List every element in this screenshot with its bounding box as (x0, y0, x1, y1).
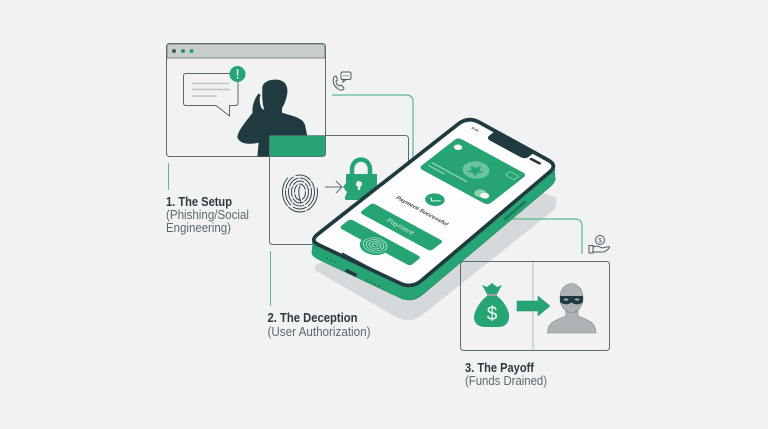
phone side band (312, 122, 555, 300)
icon: fingerprint (282, 172, 318, 212)
success check badge (421, 191, 449, 209)
payment button (360, 203, 443, 251)
connector: setup to phone (332, 95, 413, 162)
phone (312, 118, 555, 300)
label: step 1: 1. The Setup (166, 194, 232, 209)
chat bubble (184, 74, 238, 116)
label: step 2 (268, 310, 370, 339)
panel 3: the payoff (460, 262, 610, 350)
payment card (419, 137, 527, 205)
panel 1: the setup browser window (166, 44, 326, 157)
silhouette: person on phone (237, 80, 307, 157)
status icons (529, 157, 542, 165)
label: step 2: 2. The Deception (268, 310, 358, 325)
label: step 1: (Phishing/Social (166, 208, 249, 222)
phone bottom details (326, 257, 380, 287)
phone bezel and screen (312, 118, 555, 287)
panel 2: the deception (270, 136, 408, 244)
overlap green block (270, 136, 326, 156)
arrow: money to thief (517, 296, 550, 316)
icon: phone with chat (333, 72, 351, 90)
browser dots (172, 49, 194, 53)
payment successful text: Payment Successful (394, 195, 450, 227)
phone notch (486, 130, 536, 160)
fingerprint button (331, 219, 421, 272)
home indicator (342, 253, 372, 269)
phone shadow (318, 185, 553, 317)
step 1 marker line (168, 163, 169, 190)
label: step 1 (166, 194, 249, 235)
icon: money bag (474, 283, 509, 327)
icon: money bag: $ (487, 304, 498, 325)
label: step 3: 3. The Payoff (465, 360, 535, 375)
step 2 marker line (270, 251, 271, 306)
browser title bar (167, 44, 325, 58)
icon: hand with dollar coin: $ (598, 238, 602, 244)
label: step 1: Engineering) (166, 221, 231, 235)
payment button: Payment (384, 217, 417, 237)
connector: phone to payoff (503, 219, 582, 254)
label: step 3: (Funds Drained) (465, 374, 547, 388)
label: step 3 (465, 360, 547, 388)
label: step 2: (User Authorization) (268, 325, 370, 339)
icon: thief (548, 284, 596, 333)
status time: 9:41 (470, 127, 480, 133)
infographic canvas (166, 43, 610, 388)
phone side button (505, 202, 525, 219)
icon: hand with dollar coin (589, 236, 609, 253)
alert badge (230, 66, 246, 82)
icon: padlock (343, 160, 377, 200)
arrow: fingerprint to lock (325, 181, 342, 193)
